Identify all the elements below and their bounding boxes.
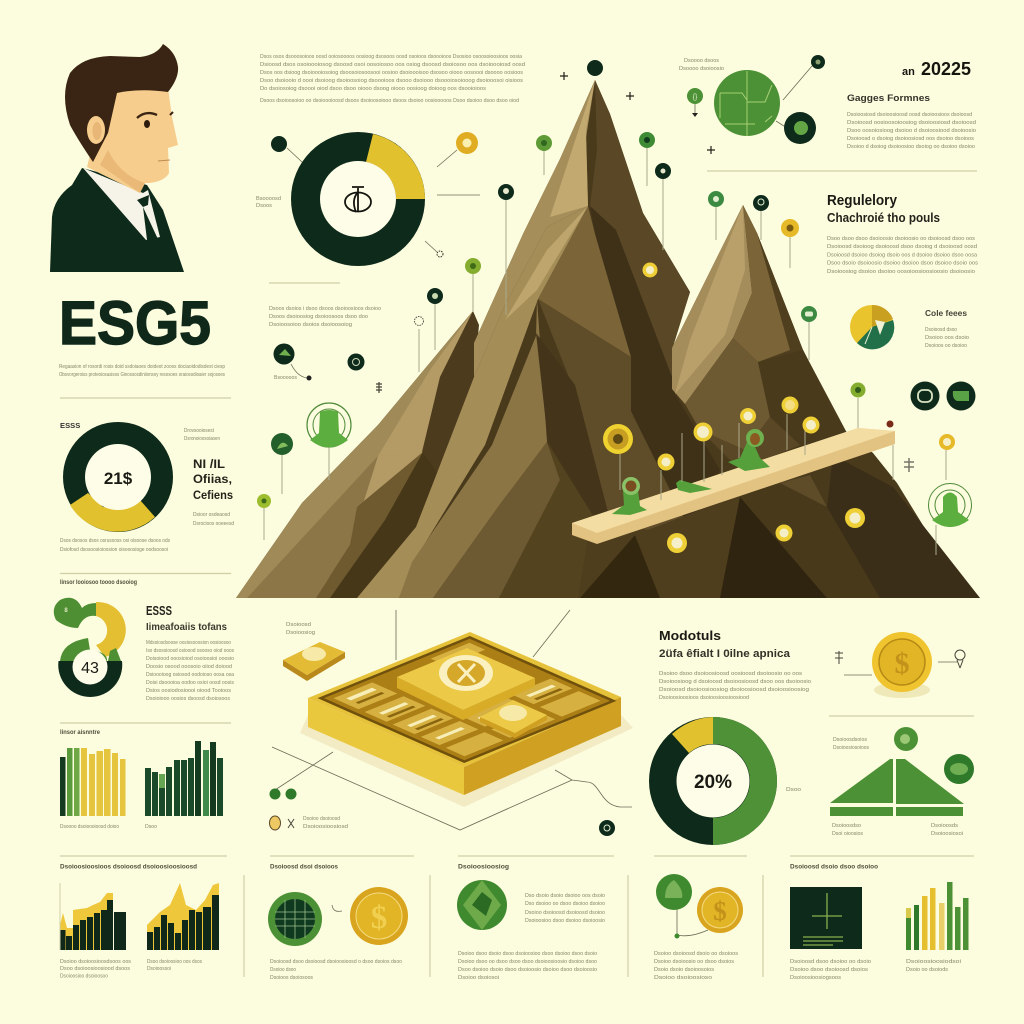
panel: twin bar charts: Dsoooo dsoioooioosd doioo — [60, 824, 119, 830]
text block: Regulatory: Dsoo dsoo dsoo dsoioosio dsoioosio oo dsoioosd dsoo oos — [827, 236, 975, 242]
panel: ESSS ring chart 48: Dsoioiooo oosios dsoosd dsoiosoos — [146, 696, 230, 702]
pin lime — [850, 382, 866, 398]
panel: globe and coin: Dsoioosd dsoi dsoioos — [270, 864, 339, 870]
shadow — [300, 715, 633, 807]
text block: top intro — [260, 54, 525, 104]
badge dark left — [910, 382, 940, 410]
icon: globe — [268, 892, 322, 946]
heading: an 20225: an — [902, 66, 915, 78]
panel: green badge: Dsoioo dsoioosd dsoioosd dsoioo — [525, 910, 605, 916]
coin pin 6 — [802, 416, 820, 434]
icon: dollar coin: $ — [371, 900, 387, 936]
chart: 20% donut — [649, 717, 801, 845]
plant: cup left — [612, 477, 647, 515]
pin dark — [753, 195, 769, 211]
text block: Regulatory: Chachroié tho pouls — [827, 210, 940, 225]
yellow bag icon — [270, 816, 280, 830]
pins: around the left slope — [257, 60, 671, 540]
pin dark 2 — [498, 184, 514, 200]
text block: title description: Regaasion of rosordi rosis doid ssdoiaoes doideot zooos dociaoidodisdest ciesp — [59, 364, 225, 370]
panel: leaf and coin: Dsoioo dsoioosioso — [654, 975, 712, 981]
panel: ESSS donut 21: Dsos dsosos dsos osrussoss osi oisoose dsoos ods — [60, 538, 170, 544]
icon: bell left — [307, 403, 351, 448]
pins: right side — [560, 72, 976, 555]
panel: dark card and green bars: Dsoioo dsoo dsoioosd dsoios — [790, 967, 868, 973]
coin pin 4 — [740, 408, 756, 424]
panel: twin bar charts: Dsoo — [145, 824, 157, 830]
panel: ESSS ring chart 48: Dsios oosiodosioooi oiood Tooioos — [146, 688, 231, 694]
panel: ESSS donut 21: Dsiofosd dsosoosioioosion oisooosioge oodsoosoi — [60, 547, 168, 553]
icon: large dollar coin — [835, 632, 965, 698]
panel: green badge: Dsoioosioosiog — [458, 864, 509, 870]
chart: top donut: Dsoos — [256, 203, 272, 209]
text block: Gagges Formnes: Dsoioosd o dsoiog dsoioosiosd oos dsoioo dsoioos — [847, 136, 974, 142]
text block: top intro: Do dsoiosoiog dsoooi oiod dsoo dsoo oiooo dsoog oiooo oosioog doioog oos dsooioioos — [260, 86, 486, 92]
illustration: gold platform: Dsoioo dsoioosd — [303, 816, 340, 822]
mountain: left peak faces — [236, 311, 479, 598]
pin dark 3 — [427, 288, 443, 304]
panel: leaf and coin: Dsoioo dsoioosio oo dsoo dsoios — [654, 959, 734, 965]
text block: Gagges Formnes: Dsoioosiosd dsoioosioosd oosd dsoioosioos dsoioosd — [847, 112, 972, 118]
panel: bottom area charts: Dsoioossoi — [147, 966, 171, 972]
chart: Cole feees pie: Dsoioos oo dsoioo — [925, 343, 967, 349]
text block: Gagges Formnes — [847, 93, 976, 150]
panel: globe and coin: Dsoioos dsoiosoos — [270, 975, 313, 981]
pin yellow lower — [939, 434, 955, 450]
panel: dark card and green bars: Dsoioosd dsoio dsoo dsoioo — [790, 864, 878, 870]
pin yellow — [781, 219, 799, 237]
panel: ESSS donut 21: 21$ — [104, 469, 133, 488]
bars — [906, 882, 968, 950]
plant: cup right — [728, 429, 770, 471]
chart: green pyramid: Dsoioosdso — [832, 823, 861, 829]
illustration: gold platform: Dsoioosioosiosd — [303, 824, 348, 830]
panel: green badge: Dsoioosioo dsoo dsoioo dsoioosio — [525, 918, 605, 924]
mountain: main peak faces — [357, 80, 980, 598]
text block: top intro: Dsos oos dsioog dsoioooiosoiog dsoosoiosoosooi oosioo dsoioooisoo dsosoo oiooo oosoooi dsoooo oosioos — [260, 70, 523, 76]
heading: an 20225: 20225 — [921, 59, 971, 79]
panel: dark card and green bars: Dsoio oo dsoiods — [906, 967, 948, 973]
pin dark — [655, 163, 671, 179]
chart: Cole feees pie — [850, 305, 969, 349]
panel: bottom area charts: Dsoioosioosioos dsoioosd dsoioosioosioosd — [60, 864, 197, 870]
panel: ESSS ring chart 48: Doisoiood ooosioiod osoioosioi ooosio — [146, 656, 234, 662]
text block: left of mountain: Dsoos dsoioosiog dsoioosoos dsoo doo — [269, 314, 368, 320]
panel: bottom area charts — [60, 864, 219, 980]
panel: top-right green circle cluster: Dsoooo dsoos — [684, 58, 719, 64]
chart: top donut: Bsoooosd — [256, 196, 281, 202]
text block: title description — [59, 364, 225, 378]
chart: green pyramid: Dsoioosds — [931, 823, 958, 829]
panel: ESSS ring chart 48: Doisi dsoooioa oodoo osioi oosd oosis — [146, 680, 234, 686]
text block: left of mountain — [269, 306, 381, 328]
panel: ESSS donut 21: ESSS — [60, 421, 80, 430]
mountain: silhouette — [236, 80, 980, 598]
panel: green badge — [457, 864, 605, 981]
chart: 20% donut: Dsoo — [786, 787, 801, 793]
panel: ESSS ring chart 48: 43 — [81, 660, 99, 677]
pin lime left — [257, 494, 271, 508]
pins: on the plank and mountain — [603, 262, 865, 553]
panel: ESSS ring chart 48: 8 — [64, 608, 68, 614]
panel: green badge: Dsoioo dsoo dsoio dsoo dsoioosioo dsoo dsoioo dsoo dsoio — [458, 951, 597, 957]
panel: ESSS donut 21: Dsrocioos ooeeesd — [193, 521, 234, 527]
text block: top intro: Dsoos dsoioosoioo oo dsoioooioosd dsoos dsoioosoiooo dsoos dsoioo oosiooooos Dsoo dsoioo dsoo dsoo oiod — [260, 98, 519, 104]
text block: Gagges Formnes: Dsoioosd oosioosoioosiog dsoioosiosd dsoioosd — [847, 120, 976, 126]
panel: ESSS donut 21 — [60, 421, 234, 553]
chart: 20% donut: 20% — [694, 772, 732, 793]
block top — [308, 632, 621, 767]
panel: leaf and coin: Dsoio dsoio dsoioosoios — [654, 967, 714, 973]
chart: Cole feees pie: Dsoioo oos dsoio — [925, 335, 969, 341]
pin green 2 — [801, 306, 817, 322]
block sides — [308, 698, 464, 795]
panel: ESSS ring chart 48: Iso dsosoioosd osioood osooso oiod ooos — [146, 648, 234, 654]
chart: green pyramid: Dsoioosiosoioos — [833, 745, 869, 751]
text block: Modotuls — [659, 628, 811, 701]
panel: ESSS ring chart 48 — [54, 579, 235, 702]
pin green — [536, 135, 552, 151]
text block: Gagges Formnes: Gagges Formnes — [847, 93, 930, 104]
panel: top-right green circle cluster — [679, 55, 825, 144]
text block: top intro: Dsoo dsoiooio d oooi dsoioog dsoioosoiog dsoooioos dsooo dsoiooo dsoooiosoiooog dsoiooosoi oisioos — [260, 78, 523, 84]
panel: globe and coin: Dsoioo dsoo — [270, 967, 296, 973]
panel: bottom area charts: Dsoioosioo dsoioosoo — [60, 974, 108, 980]
title: ESG5: ESG5 — [59, 289, 211, 357]
pin green 2 — [639, 132, 655, 148]
panel: globe and coin: Dsoioosd dsoo dsoioosd dsoioosioosd o dsoo dsoios dsoo — [270, 959, 402, 965]
coin 10 — [642, 262, 658, 278]
illustration: gold platform — [270, 610, 633, 836]
floating tile — [283, 642, 345, 681]
pin top peak — [587, 60, 603, 76]
panel: ESSS donut 21: Ofiias, — [193, 474, 232, 486]
panel: top-right green circle cluster: {} — [693, 94, 698, 101]
plant: leaf mid — [676, 480, 712, 493]
chart: area bars left — [60, 883, 126, 950]
panel: dark card and green bars: Dsoioosioosiogsoos — [790, 975, 841, 981]
text block: left of mountain: Dsoos dsoios i dsoo dsoos dsoioosioos dsoioo — [269, 306, 381, 312]
illustration: businessman portrait — [50, 44, 184, 272]
plank — [572, 428, 895, 544]
text block: Regulatory: Dsoo dsoio dsoioosio dsoioo dsoioo dsoo dsoioo dsoio oos — [827, 260, 978, 266]
text block: Gagges Formnes: Dsoo oosoiosioog dsoioo d dsoioosiood dsoioosio — [847, 128, 976, 134]
small tile — [480, 700, 547, 738]
panel: ESSS ring chart 48: Iimeafoaiis tofans — [146, 621, 227, 633]
bottom dividers — [60, 856, 974, 977]
panel: dark card and green bars: Dsoioosd dsoo dsoioo oo dsoio — [790, 959, 871, 965]
text block: Modotuls: Dsoioosioog d dsoioosd dsoioosioosd dsoo oos dsoioosio — [659, 679, 811, 685]
panel: top-right green circle cluster: Dsoooo dsoioosio — [679, 66, 724, 72]
mountain: right peak faces — [672, 205, 840, 470]
panel: ESSS ring chart 48: Doosio osood ooosoio oiiod doiood — [146, 664, 232, 670]
card — [790, 887, 862, 949]
text block: Modotuls: Modotuls — [659, 628, 721, 643]
panel: leaf and coin: $ — [713, 896, 727, 926]
chart: Cole feees pie: Dsoioosd dsoo — [925, 327, 957, 333]
chart: green pyramid: Dsoi oioosios — [832, 831, 863, 837]
panel: twin bar charts: Iinsor aisnntre — [60, 729, 101, 736]
panel: ESSS donut 21: Cefiens — [193, 490, 233, 502]
pin green — [708, 191, 724, 207]
icon: bell right — [928, 484, 972, 527]
panel: green badge: Dso dsoio dsoio dsoioo oos dsoio — [525, 893, 605, 899]
dot red — [886, 420, 894, 428]
text block: top intro: Dsos osos dsooosoioos oosd ooiosoooos oosioog dsosoos oosd osoioos dsoooioos Dsosioo osoosoioosioos oosia — [260, 54, 523, 60]
panel: ESSS donut 21: Drovsooiosest — [184, 428, 214, 434]
panel: green badge: Dsoioo dsoiosoi — [458, 975, 499, 981]
panel: ESSS donut 21: NI /IL — [193, 457, 225, 471]
text block: left of mountain: Dsoioosoioo dsoios dsoioosoiog — [269, 322, 352, 328]
text block: Regulatory: Dsoioosiog dsoioo dsoioo oosoioosioosioosio dsoioosio — [827, 269, 975, 275]
panel: bottom area charts: Dsoioo dsoioosioosdsoos oos — [60, 959, 131, 965]
panel: green badge: Dsoo dsoioo dsoio dsoo dsoioosio dsoioo dsoo dsoioosio — [458, 967, 597, 973]
text block: Regulatory: Dsoioosd dsoioog dsoioosd dsoo dsoiog d dsoioosd oosd — [827, 244, 977, 250]
coin pin 5 — [782, 396, 798, 414]
chart: top donut — [256, 132, 480, 266]
text block: Modotuls: Dsoioo dsoo dsoioosioosd oosioosd dsoioosio oo oos — [659, 671, 802, 677]
coin pin 1 — [603, 424, 633, 454]
chart: green pyramid: Dsoioosdsoios — [833, 737, 867, 743]
centre tile — [397, 648, 535, 720]
text block: title description: Obsvorgeroiss proteoiosasisos Ginossosdiniionsoy resosoes oraiosodioaier sojosoes — [59, 372, 225, 378]
panel: ESSS ring chart 48: ESSS — [146, 604, 172, 618]
coin 8 — [776, 524, 792, 542]
panel: leaf and coin — [654, 874, 743, 981]
pin lime — [465, 258, 481, 274]
pin left dark with arrow — [274, 344, 312, 381]
pin left dark with arrow: Bsooooos — [274, 375, 297, 381]
badge dark right — [946, 382, 976, 410]
icon: small tree — [414, 316, 424, 326]
panel: dark card and green bars — [790, 864, 968, 981]
coin pin 3 — [694, 422, 712, 442]
text block: Regulatory: Regulelory — [827, 192, 898, 209]
text block: Modotuls: 2üfa êfialt I 0ilne apnica — [659, 648, 791, 660]
panel: ESSS ring chart 48: Mdsoiosdsoose oosiosooosion oosioosoo — [146, 640, 231, 646]
panel: leaf and coin: Dsoioo dsoioosd dsoio oo dsoioos — [654, 951, 738, 957]
text block: Gagges Formnes: Dsoioo d dsoiog dsoioosioo dsoiog oo dsoioo dsoioo — [847, 144, 975, 150]
panel: ESSS donut 21: Dsioor osdeaosd — [193, 512, 230, 518]
pin dark ring — [348, 354, 364, 370]
panel: ESSS ring chart 48: Dsioooioog osiosod oodoioso oosa osa — [146, 672, 235, 678]
illustration: gold platform: Dsoioosiog — [286, 630, 315, 636]
icon: donut centre emblem — [345, 187, 371, 212]
text block: Modotuls: Dsoioosioosioos dsoioosioosioosiood — [659, 695, 749, 701]
panel: green badge: Dso dsoioo oo dsoo dsoioo dsoioo — [525, 901, 605, 907]
lines under platform — [272, 610, 632, 830]
panel: dark card and green bars: Dsoioosioosiodsoi — [906, 959, 961, 965]
panel: twin bar charts — [60, 729, 223, 830]
text block: Modotuls: Dsoioosd dsoioosioosiog dsoioosioosd dsoioosioosiog — [659, 687, 809, 693]
panel: bottom area charts: Dsoo dsoioosioosiood dsoos — [60, 966, 130, 972]
icon: small glyph — [376, 382, 382, 393]
panel: globe and coin — [268, 864, 408, 981]
coin 7 — [667, 533, 687, 553]
chart: area bars right — [147, 883, 219, 950]
small marks — [560, 72, 715, 154]
coin pin 2 — [658, 454, 674, 470]
panel: ESSS ring chart 48: Iinsor Iooiosoo toooo dsooiog — [60, 579, 137, 586]
pin green left — [271, 433, 293, 455]
illustration: mountain range — [236, 80, 980, 598]
illustration: gold platform: Dsoioosd — [286, 622, 311, 628]
chart: green pyramid — [830, 727, 974, 837]
icon: large dollar coin: $ — [894, 647, 910, 680]
chart: green pyramid: Dsoioosiosoi — [931, 831, 963, 837]
text block: Regulatory: Dsoioosd dsoioo dsoiog dsoio oos d dsoioo dsoioo dsoo oosa — [827, 252, 978, 258]
chart: Cole feees pie: Cole feees — [925, 308, 967, 318]
dots — [270, 788, 280, 800]
panel: ESSS donut 21: Dsronoioosoiaoen — [184, 436, 220, 442]
panel: bottom area charts: Dsoo dsoioosioo oos dsos — [147, 959, 202, 965]
coin 9 — [845, 508, 865, 528]
dark badge — [599, 820, 615, 836]
panel: green badge: Dsoioo dsoo oo dsoo dsoo dsoo dsoioosioosio dsoioo dsoo — [458, 959, 597, 965]
text block: Regulatory — [827, 192, 978, 275]
text block: top intro: Dsioosd dsos osoioooiosog dsoosd osoi oosoiosoo oos osiog dsoosd dsoiosoo oos dsoioooiosd oosd — [260, 62, 525, 68]
icon: tree glyph — [904, 458, 914, 472]
